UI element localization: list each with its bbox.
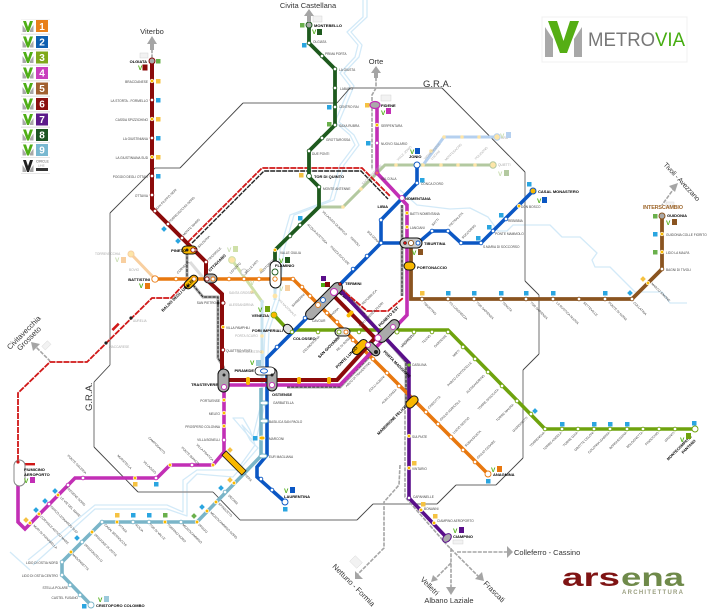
station labels: horizontal: FLAMINIO xyxy=(275,263,294,268)
legend circle line: LINE xyxy=(38,164,45,168)
station labels: horizontal: LAURENTINA xyxy=(284,494,310,499)
station labels: rotated -45, reading up from the station: TRIONFALE xyxy=(207,246,222,262)
station labels: horizontal: EUR MAGLIANA xyxy=(269,455,294,459)
station labels: rotated -45, ending below the station: TORRE ANGELA xyxy=(542,430,563,451)
station labels: horizontal: TRASTEVERE xyxy=(191,382,218,387)
station labels: rotated -45, reading up from the station: MONTE MARIO xyxy=(182,217,201,237)
station labels: horizontal: COLOSSEO xyxy=(293,336,316,341)
station labels: horizontal: BASILICA SAN PAOLO xyxy=(269,420,303,424)
station labels: rotated +45: VIA NAZIONALE xyxy=(277,298,297,318)
destination labels: G.R.A. xyxy=(423,79,452,90)
station labels: horizontal: DON BOSCO xyxy=(521,205,541,209)
station labels: rotated -45, reading up from the station: MALATESTA xyxy=(400,332,416,349)
station labels: rotated -45, ending below the station: COLONNA GABINIA xyxy=(587,430,611,455)
station labels: rotated +45: MURATELLA xyxy=(116,454,133,471)
station labels: horizontal: ANAGNINA xyxy=(493,472,515,477)
station labels: rotated -45, reading up from the station: VIGNE NUOVE xyxy=(423,142,441,161)
station labels: rotated +45: MADONNETTA xyxy=(71,553,90,572)
legend row 8 xyxy=(21,128,50,142)
station labels: rotated +45: TENUTA xyxy=(501,301,514,313)
station labels: rotated -45, reading up from the station: SOCCORSO xyxy=(461,223,477,240)
station labels: rotated -45, reading up from the station: AUDITORIUM xyxy=(259,257,276,275)
line badges near terminals: V xyxy=(115,257,120,264)
station labels: rotated +45: BOLOGNA xyxy=(366,230,381,244)
line 2 blue xyxy=(257,165,533,502)
station labels: horizontal: BATTI NOMENTANA xyxy=(410,212,441,216)
station labels: rotated +45: FIERA xyxy=(243,473,253,483)
station labels: rotated -45, reading up from the station: LEPANTO xyxy=(229,261,242,275)
station labels: rotated +45: DRAGO xyxy=(197,523,209,534)
station labels: rotated -45, ending below the station: BOLOGNETTA xyxy=(626,430,644,449)
line 7 purple xyxy=(338,288,447,538)
line badges near terminals: V xyxy=(412,250,417,257)
station labels: rotated +45: DRAGONCELLO xyxy=(83,543,104,563)
logo: arsena architettura: ars xyxy=(562,564,620,592)
station labels: rotated +45: DRAGONE DI OSTIA xyxy=(93,533,118,558)
station labels: horizontal: PORTONACCIO xyxy=(417,265,447,270)
station labels: horizontal: OSTIENSE xyxy=(272,392,293,397)
destination labels: G.R.A. xyxy=(84,382,95,411)
station labels: rotated +45: DECIMA xyxy=(227,494,240,506)
station labels: rotated -45, ending below the station: GIARDINETTI xyxy=(512,416,529,433)
destination labels: Colleferro - Cassino xyxy=(514,548,580,557)
legend row 1 xyxy=(21,20,50,34)
station labels: horizontal: LIBIA xyxy=(378,204,388,209)
station labels: rotated +45: TOR DI VALLE xyxy=(148,523,166,541)
station labels: horizontal: BONANNI xyxy=(424,507,439,511)
station labels: rotated -45, ending below the station xyxy=(302,334,697,461)
line 3 green xyxy=(274,315,695,429)
station labels: rotated -45, ending below the station: ALBA LONGA xyxy=(381,387,398,405)
station labels: rotated -45, reading up from the station: SAN LORENZO FUORI xyxy=(358,301,385,328)
station labels: horizontal: AURELIA xyxy=(133,319,148,323)
line badges near terminals: V xyxy=(258,307,263,314)
station labels: rotated +45: ACILIA xyxy=(134,523,145,533)
station labels: horizontal: NOMENTANA xyxy=(405,196,431,201)
station labels: horizontal: STELLA POLARE xyxy=(42,586,68,590)
station labels: rotated -45, ending below the station: CELIMONTANA xyxy=(302,334,321,354)
station labels: horizontal: OTTAVIA xyxy=(135,194,149,198)
station labels: rotated -45, reading up from the station: GIULIO AGRICOLA xyxy=(439,398,462,422)
station labels: horizontal: LA STORTA - FORMELLO xyxy=(111,99,149,103)
station labels: horizontal: CASSIA SPIZZICHINO xyxy=(115,118,149,122)
station labels: horizontal: QUIETTI xyxy=(498,163,511,167)
station labels: rotated -45, reading up from the station: PIETRALATA xyxy=(448,211,465,228)
station labels: horizontal: CAVOUR xyxy=(312,319,326,323)
legend row 2: 2 xyxy=(39,38,45,48)
station labels: horizontal: SAN PIETRO xyxy=(197,301,217,305)
station labels: rotated +45: MEZZOCAMMINO NORD xyxy=(209,511,239,540)
station labels: horizontal: CRISTOFORO COLOMBO xyxy=(96,603,145,608)
destination labels: Nettuno - Formia xyxy=(331,562,377,609)
station labels: horizontal: ALESSANDRINA xyxy=(229,303,254,307)
legend row 3 xyxy=(21,50,50,64)
station labels: horizontal: PIRAMIDE xyxy=(234,368,254,373)
station labels: horizontal: GARBATELLA xyxy=(273,401,295,405)
destination labels: Civitavecchia xyxy=(5,313,43,351)
station labels: horizontal: BOVIO xyxy=(129,268,140,272)
station labels: horizontal: VINTARIO xyxy=(412,467,427,471)
destination labels: Orte xyxy=(369,57,383,66)
destination labels: Velletri xyxy=(419,575,441,598)
line badges near terminals: V xyxy=(139,283,144,290)
station labels: horizontal: SAXA RUBRA xyxy=(339,124,360,128)
line badges near terminals: V xyxy=(227,247,232,254)
station labels: horizontal: PROSPERO COLONNA xyxy=(185,425,221,429)
line badges near terminals: V xyxy=(666,220,671,227)
station labels: rotated +45: PONTE BIANCO xyxy=(180,446,201,466)
station labels: horizontal: DUE PONTI xyxy=(312,152,329,156)
station labels: rotated +45: MEZZOCAMMINO xyxy=(181,523,203,545)
station labels: rotated +45: CORVIALE ANTICO MARE xyxy=(39,515,70,545)
stations line 3 xyxy=(271,312,698,432)
station labels: rotated +45 xyxy=(32,210,671,572)
destination labels: Grosseto xyxy=(15,325,43,352)
station labels: rotated +45: FS LUNGHEZZA xyxy=(448,301,469,321)
station labels: rotated +45: VITINIA xyxy=(117,523,129,534)
station labels: horizontal: BRACCIANESE xyxy=(125,80,148,84)
legend row 5: 5 xyxy=(39,84,45,95)
legend row 7: 7 xyxy=(39,115,45,126)
line badges near terminals: V xyxy=(250,280,255,287)
station labels: horizontal: TORREVECCHIA xyxy=(95,252,121,256)
station labels: horizontal: JONIO xyxy=(409,154,421,159)
station labels: horizontal: SAN SILVESTRO xyxy=(237,350,263,354)
logo: METROVIA xyxy=(542,17,687,62)
station labels: rotated +45: LA RUSTICA NUOVA xyxy=(555,301,580,326)
station labels: rotated -45, ending below the station: ARCO DI TRAVERTINO xyxy=(345,361,372,388)
destination labels: Frascati xyxy=(482,579,507,605)
station labels: horizontal: FIDENE xyxy=(381,103,396,108)
station labels: horizontal: SERPENTARA xyxy=(381,124,403,128)
station labels: horizontal: NUOVO SALARIO xyxy=(381,142,408,146)
station labels: horizontal: CAPANNELLE xyxy=(413,495,434,499)
station labels: horizontal: LABARO xyxy=(340,87,353,91)
station labels: horizontal: LANCIANI xyxy=(410,226,425,230)
station labels: rotated -45, ending below the station: PARCO CENTOCELLE xyxy=(446,361,473,387)
station labels: horizontal: PORTA SCURO xyxy=(235,334,258,338)
line 4 magenta xyxy=(18,105,407,529)
station labels: rotated +45: VILLAGGIO xyxy=(142,460,158,475)
station labels: rotated +45: TORRINO NORD xyxy=(166,523,187,544)
station labels: horizontal: BATTISTINI xyxy=(128,277,150,282)
line badges near terminals: V xyxy=(138,65,143,72)
station labels: rotated -45, reading up from the station: LUCANI xyxy=(430,150,441,161)
station labels: horizontal: S.MARIA DI SOCCORSO xyxy=(483,245,520,249)
station labels: horizontal: CASTEL FUSANO xyxy=(52,596,79,600)
station labels: rotated +45: CAMPOSANTO xyxy=(147,436,166,455)
station labels: rotated +45: SETTEVILLE xyxy=(582,301,599,317)
station labels: horizontal: SULPIATE xyxy=(412,435,427,439)
line 1 orange xyxy=(155,279,488,474)
G.R.A. ring road xyxy=(94,88,539,520)
station labels: rotated +45: PORTA MAGGIORE xyxy=(382,349,412,379)
station labels: rotated -45, ending below the station: BORGHESIANA xyxy=(608,430,628,450)
station labels: rotated -45, reading up from the station: POLIGONO xyxy=(474,145,489,161)
station labels: rotated -45, ending below the station: SAN GIOVANNI xyxy=(317,335,341,359)
station labels: rotated -45, reading up from the station: BARBERINI xyxy=(291,293,306,308)
station labels: rotated -45, ending below the station: RE DI ROMA xyxy=(335,335,352,352)
legend row 6: 6 xyxy=(39,100,45,110)
legend row 2 xyxy=(21,35,50,49)
legend row 4: 4 xyxy=(39,68,45,80)
station labels: horizontal: LIDO LA MALFA xyxy=(666,251,690,255)
station labels: rotated +45: TIBURTINO xyxy=(422,301,438,316)
station labels: rotated +45: PONTE GALERIA xyxy=(66,454,88,475)
line badges near terminals: V xyxy=(381,110,386,117)
station labels: horizontal: POGGIO DEGLI OTTAVI xyxy=(113,175,148,179)
station labels: horizontal: FORI IMPERIALI xyxy=(252,328,283,333)
station labels: horizontal: VENEZIA xyxy=(252,313,269,318)
station labels: rotated +45: TOR SAPIENZA xyxy=(475,301,495,321)
station labels: rotated -45, reading up from the station: BATTI xyxy=(431,218,440,227)
line badges near terminals: V xyxy=(410,149,415,156)
stations line 7 xyxy=(407,363,453,544)
station labels: horizontal: LIDO DI OSTIA CENTRO xyxy=(22,574,59,578)
stations line 8 xyxy=(272,22,337,275)
station labels: rotated +45: VILLA PRATICA xyxy=(195,443,215,463)
line badges near terminals: V xyxy=(500,133,505,140)
station labels: horizontal: PRIMA PORTA xyxy=(325,52,347,56)
red dashed railway FL xyxy=(18,168,403,468)
legend row 9: 9 xyxy=(39,146,45,156)
station labels: rotated +45: PONTE DI NONA xyxy=(607,301,629,322)
legend row 7 xyxy=(21,112,50,126)
line badges near terminals: V xyxy=(284,488,289,495)
legend row 1: 1 xyxy=(39,22,45,33)
legend row 9 xyxy=(21,143,50,157)
station labels: horizontal: SANTA GROSSA xyxy=(229,291,255,295)
destination labels: Viterbo xyxy=(140,27,164,36)
line badges near terminals: V xyxy=(279,286,284,293)
station labels: rotated -45, ending below the station: GRANITI xyxy=(664,431,676,443)
station labels: rotated -45, reading up from the station: OTTAVIANO xyxy=(207,253,227,273)
station labels: rotated -45, reading up from the station: MONTESACRO xyxy=(444,142,463,162)
station labels: horizontal: MARCONI xyxy=(269,437,284,441)
station labels: horizontal: MONTE ANTENNE xyxy=(323,187,350,191)
station labels: rotated -45, ending below the station: FINOCCHIO xyxy=(644,431,660,446)
station labels: horizontal: PINETO xyxy=(171,248,186,253)
grey ring band with black dashes xyxy=(187,205,406,405)
line 6 dark red xyxy=(152,61,375,380)
line badges near terminals: V xyxy=(312,29,317,36)
station labels: rotated -45, ending below the station: GARDENIE xyxy=(433,334,448,348)
station labels: horizontal: CONCA D'ORO xyxy=(421,182,444,186)
legend circle line: CIRCLE xyxy=(36,160,50,164)
logo: arsena architettura: ARCHITETTURA xyxy=(622,590,684,596)
logo: METROVIA: METROVIA xyxy=(588,29,685,51)
station labels: rotated -45, reading up from the station: REPUBBLICA xyxy=(361,288,379,306)
station labels: rotated +45: MARCO SIMONE xyxy=(650,282,671,303)
logo: arsena architettura xyxy=(562,564,686,596)
station labels: rotated +45: CASAL BERNOCCHI xyxy=(103,523,128,547)
station labels: rotated -45, ending below the station: PANTANO xyxy=(681,439,697,455)
station labels: rotated -45, reading up from the station: SUBAUGUSTA xyxy=(464,429,483,448)
station labels: rotated -45, ending below the station: COLLI ALBANI xyxy=(368,375,386,393)
stations line 6 xyxy=(149,58,225,352)
legend row 5 xyxy=(21,82,50,96)
station labels: rotated -45, ending below the station: TORRENOVA xyxy=(529,430,546,448)
station labels: rotated -45, ending below the station: GROTTE CELONI xyxy=(573,431,595,452)
station labels: rotated +45: LE VIE DEL MARE xyxy=(59,496,81,518)
station labels: rotated +45: PARIOLI xyxy=(349,236,361,248)
station labels: horizontal: CIAMPINO xyxy=(453,534,473,539)
station labels: horizontal: FIUMICINO xyxy=(24,467,45,472)
station labels: horizontal: TIBURTINA xyxy=(424,241,446,246)
legend xyxy=(21,19,50,174)
station labels: rotated -45, reading up from the station: GIULIO CESARE xyxy=(476,439,496,460)
station labels: horizontal: PORTUENSE xyxy=(200,399,220,403)
station labels: rotated +45: SPINACETO xyxy=(217,502,233,518)
line 8 dark green xyxy=(275,25,335,268)
station labels: horizontal: GUIDONIA xyxy=(667,213,687,218)
station labels: rotated -45, ending below the station: MANDRIONE FELICE xyxy=(376,404,408,436)
station labels: horizontal: MONTEBELLO xyxy=(314,23,342,28)
station labels: horizontal: REBIBBIA xyxy=(508,219,524,223)
station labels: rotated +45: TOR SAPIENZA xyxy=(529,301,549,321)
station labels: rotated -45, ending below the station: MIRTI xyxy=(452,349,461,358)
line 9 teal xyxy=(62,388,261,605)
station labels: rotated -45, reading up from the station: SPAGNA xyxy=(328,306,341,319)
station labels: horizontal: TERMINI xyxy=(345,281,361,286)
station labels: rotated -45, reading up from the station: LUCIO SESTIO xyxy=(452,416,471,435)
station labels: horizontal: MELEO xyxy=(209,412,221,416)
line 5 brown xyxy=(411,216,662,299)
station labels: horizontal: BAGNI DI TIVOLI xyxy=(666,268,691,272)
station labels: horizontal: LA GIUSTA xyxy=(339,68,356,72)
station labels: horizontal: CASILINA xyxy=(412,363,427,367)
station labels: horizontal: LA GIUSTINIANA xyxy=(123,137,149,141)
station labels: rotated -45, ending below the station: TORRE SPACCATA xyxy=(477,387,500,411)
station labels: horizontal: CENTRO RAI xyxy=(339,105,359,109)
station labels: rotated -45, reading up from the station: BELLE ARTI xyxy=(244,259,259,275)
station labels: rotated -45, ending below the station: MONTECOMPATRI xyxy=(666,435,693,461)
stations line 5 xyxy=(420,213,665,301)
line badges near terminals: V xyxy=(491,467,496,474)
station labels: horizontal: LA GIUSTINIANA SUD xyxy=(116,156,149,160)
line badges near terminals: V xyxy=(98,597,103,604)
station labels: rotated -45, reading up from the station: PIGNETO EST xyxy=(377,305,400,328)
line badges near terminals: V xyxy=(24,478,29,485)
station labels: rotated +45: ACQUA ACETOSA xyxy=(306,223,329,245)
station labels: rotated -45, reading up from the station: TORREVECCHIA NORD xyxy=(168,195,196,224)
line badges near terminals: V xyxy=(537,198,542,205)
station labels: horizontal: VILLA BONELLI xyxy=(197,438,220,442)
station labels: rotated +45: MURI DI PIANABELLA xyxy=(32,524,59,550)
legend row 4 xyxy=(21,66,50,80)
station labels: rotated +45: PIAZZA EUCLIDE xyxy=(329,245,350,266)
station labels: horizontal: TOR DI QUINTO xyxy=(314,174,344,179)
station labels: rotated -45, ending below the station: ALESSANDRINO xyxy=(465,374,486,394)
station labels: rotated -45, ending below the station: PIGNETO xyxy=(401,334,414,347)
legend row 3: 3 xyxy=(39,53,45,64)
station labels: rotated -45, reading up from the station: SAN FILIPPO NERI xyxy=(155,188,178,211)
destination labels: Tivoli - Avezzano xyxy=(662,162,701,203)
station labels: horizontal: AEROPORTO xyxy=(24,472,50,477)
station labels: horizontal: LIDO DI OSTIA NORD xyxy=(26,561,59,565)
station labels: rotated -45, reading up from the station: BALDO DEGLI UBALDI xyxy=(160,278,195,313)
station labels: horizontal: INTERSCAMBIO xyxy=(643,205,684,211)
station labels: horizontal: CASAL MONASTERO xyxy=(538,189,579,194)
line badges near terminals: V xyxy=(250,360,255,367)
station labels: horizontal: GRA xyxy=(501,136,509,140)
station labels: horizontal: GROTTAROSSA xyxy=(326,138,351,142)
stations in interchange pills and faded stops xyxy=(16,134,500,464)
station labels: horizontal: CIAMPINO AEROPORTO xyxy=(437,519,474,523)
station labels: rotated +45: COLLATINA xyxy=(632,301,648,317)
destination labels: Civita Castellana xyxy=(280,1,337,10)
station labels: rotated -45, ending below the station: PONTE LUNGO xyxy=(334,345,359,369)
line badges near terminals: V xyxy=(453,528,458,535)
station labels: rotated +45: FREGENE NORD xyxy=(65,486,87,507)
station labels: rotated -45, reading up from the station: CORNELIA xyxy=(176,260,191,275)
station labels: horizontal: VAL D'ALA xyxy=(381,177,397,181)
station labels: rotated -45, ending below the station: TORRE MAURA xyxy=(495,402,515,422)
destination labels: Albano Laziale xyxy=(424,596,474,605)
stations line 4 xyxy=(28,102,409,525)
line badges near terminals: V xyxy=(680,437,685,444)
station labels: horizontal: MACCARESE xyxy=(109,345,129,349)
line badges near terminals: V xyxy=(498,171,503,178)
station labels: rotated -45, reading up from the station xyxy=(155,142,496,460)
logo: arsena architettura: ena xyxy=(621,564,686,592)
station labels: rotated -45, reading up from the station: VIALE JONIO xyxy=(396,145,413,162)
station labels: rotated -45, reading up from the station: BALDUINA xyxy=(197,234,212,249)
line badges near terminals: V xyxy=(279,258,284,265)
stations line 9 xyxy=(60,401,268,608)
station labels: rotated -45, reading up from the station: CINECITTÀ xyxy=(427,394,442,410)
station labels: horizontal: OLGIATA xyxy=(130,59,147,64)
station labels: rotated -45, reading up from the station: SACCO PASTORE xyxy=(361,164,383,186)
station labels: horizontal: PONTE MAMMOLO xyxy=(495,232,524,236)
station labels: rotated +45: PARCO LEONARDO SUD xyxy=(49,505,79,535)
station labels: horizontal: VALLE GIULIA xyxy=(280,251,302,255)
interchange pills xyxy=(14,238,422,486)
station labels: horizontal: VILLA PAMPHILI xyxy=(226,326,250,330)
station labels: rotated +45: VILLAGGIO OLIMPICO xyxy=(321,210,348,237)
station labels: horizontal: OLGIATA xyxy=(313,40,327,44)
faded planned lines xyxy=(131,137,497,388)
station labels: horizontal: GUIDONIA COLLE FIORITO xyxy=(666,233,707,237)
legend row 8: 8 xyxy=(39,130,45,142)
legend circle line xyxy=(21,158,50,173)
station labels: rotated -45, ending below the station: TORRE GAIA xyxy=(562,430,579,448)
station labels: horizontal: QUATTRO VENTI xyxy=(226,349,252,353)
stations line 1 xyxy=(128,251,491,477)
station labels: rotated -45, ending below the station: TEANO xyxy=(421,334,432,344)
legend row 6 xyxy=(21,97,50,111)
stations line 2 xyxy=(259,162,536,505)
